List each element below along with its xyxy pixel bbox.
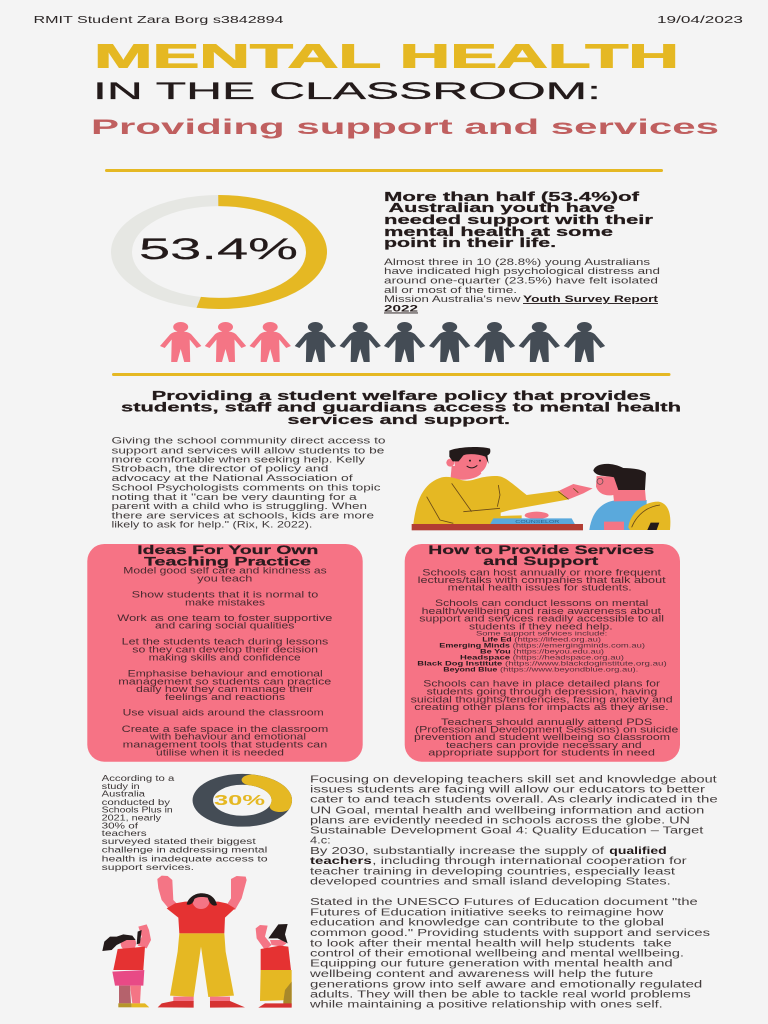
list: teaching ideas: daily how they can manage their [136, 684, 313, 694]
text: plans and professional development: Teachers should annually attend PDS [441, 717, 652, 727]
text: UN Sustainable Development Goal: teachers [310, 856, 372, 867]
text: plans and professional development: appropriate support for students in need [428, 748, 655, 758]
text: plans and professional development: Schools can have in place detailed plans for [423, 679, 660, 689]
panel heading: ideas [137, 543, 318, 568]
list: support services: Black Dog Institute [417, 661, 503, 668]
text: UN Sustainable Development Goal: qualified [609, 846, 667, 857]
panel: ideas for your own teaching practice [87, 543, 363, 762]
text: Schools Plus study: Schools Plus in [102, 805, 173, 815]
list: teaching ideas: Create a safe space in the classroom [122, 724, 328, 734]
stat body text: Youth Survey Report [523, 294, 658, 304]
text: lectures and lessons [418, 567, 666, 631]
list: teaching ideas: Show students that it is normal to [132, 589, 318, 599]
label: counselor sign: COUNSELOR [515, 519, 559, 524]
list: support services: (https://www.beyondblue.org.au). [500, 667, 639, 674]
list: support services: (https://beyou.edu.au) [513, 648, 604, 655]
section heading: student welfare policy [121, 388, 681, 427]
paragraph: direct access to support: noting that it "can be very daunting for a [112, 492, 358, 502]
list: support services: Be You [480, 648, 511, 655]
panel heading: ideas: Teaching Practice [144, 554, 312, 568]
text: UN Sustainable Development Goal [310, 775, 718, 888]
paragraph: direct access to support: Giving the school community direct access to [112, 436, 386, 446]
list: teaching ideas: make mistakes [185, 597, 266, 607]
text: UN Sustainable Development Goal: issues students are facing will allow our educators to better [310, 785, 706, 796]
header: date: 19/04/2023 [657, 15, 744, 26]
list: teaching ideas: Emphasise behaviour and emotional [128, 669, 323, 679]
paragraph: direct access to support: more comfortable when seeking help. Kelly [112, 454, 366, 464]
text: Schools Plus study: According to a [102, 773, 175, 783]
donut chart: 53.4% [122, 201, 316, 303]
paragraph: direct access to support [112, 436, 386, 530]
text: UN Sustainable Development Goal: teacher training in developing countries, especially least [310, 867, 675, 878]
text: plans and professional development: teachers can provide necessary and [446, 740, 642, 750]
text: plans and professional development: creating other plans for impacts as they arise. [414, 702, 669, 712]
text: UNESCO Futures of Education: while maintaining a positive relationship with ones self. [309, 1000, 663, 1011]
stat heading: mental health at some [384, 224, 613, 239]
paragraph: direct access to support: support and services will allow students to be [112, 445, 384, 455]
list: support services: (https://lifeed.org.au) [514, 636, 601, 643]
paragraph: direct access to support: Strobach, the director of policy and [112, 464, 328, 474]
donut chart: 30%: 30% [214, 792, 265, 809]
text: Schools Plus study: study in [102, 781, 140, 791]
paragraph: direct access to support: parent with a child who is struggling. When [112, 501, 367, 511]
list: teaching ideas: utilise when it is needed [156, 747, 284, 757]
stat heading: Australian youth have [388, 200, 615, 215]
text: UN Sustainable Development Goal: UN Goal, mental health and wellbeing information and action [310, 805, 704, 816]
paragraph: direct access to support: there are services at schools, kids are more [112, 510, 374, 520]
illustration: counsellor and student [412, 447, 670, 530]
stat heading: needed support with their [384, 212, 653, 227]
list: support services: Beyond Blue [443, 667, 498, 674]
list: support services: (https://www.blackdoginstitute.org.au) [505, 661, 667, 668]
text: lectures and lessons: mental health issues for students. [448, 583, 632, 593]
text: lectures and lessons: Schools can conduct lessons on mental [435, 598, 648, 608]
stat body text: all or most of the time. [384, 285, 517, 295]
text: UNESCO Futures of Education: adults. They will then be able to tackle real world problems [310, 990, 691, 1001]
text: Schools Plus study: teachers [102, 828, 147, 838]
text: lectures and lessons: health/wellbeing and raise awareness about [422, 606, 662, 616]
list: teaching ideas: management tools that students can [123, 739, 327, 749]
panel heading: services: How to Provide Services [428, 543, 655, 557]
text: UN Sustainable Development Goal: cater to and teach students overall. As clearly indicated in the [310, 795, 718, 806]
figure: boy [256, 924, 292, 1008]
text: plans and professional development [411, 679, 678, 758]
text: UN Sustainable Development Goal: 4.c: [310, 836, 331, 847]
panel heading: ideas: Ideas For Your Own [137, 543, 318, 557]
list: teaching ideas: making skills and confidence [149, 652, 301, 662]
text: Schools Plus study: health is inadequate access to [102, 854, 268, 864]
list: support services: Some support services include: [476, 630, 608, 637]
text: Schools Plus study [102, 773, 268, 872]
stat body text: Almost three in 10 (28.8%) young Australians [384, 257, 651, 267]
list: teaching ideas: Model good self care and kindness as [123, 565, 327, 575]
panel: how to provide services and support [405, 543, 680, 762]
text: UN Sustainable Development Goal: plans are evidently needed in schools across the globe. UN [310, 815, 690, 826]
list: teaching ideas: Use visual aids around the classroom [123, 708, 324, 718]
text: plans and professional development: students going through depression, having [427, 687, 657, 697]
text: UNESCO Futures of Education: education and knowledge can contribute to the global [310, 918, 664, 929]
figure: girl [102, 924, 151, 1007]
stat body text: Mission Australia's new [384, 294, 521, 304]
paragraph: direct access to support: likely to ask for help." (Rix, K. 2022). [112, 520, 312, 530]
text: plans and professional development: (Professional Development Sessions) on suicide [415, 725, 678, 735]
text: UN Sustainable Development Goal: Sustainable Development Goal 4: Quality Education – Target [310, 826, 704, 837]
text: UN Sustainable Development Goal: Focusing on developing teachers skill set and knowledge about [310, 775, 717, 786]
pictogram: ten people, three highlighted [160, 322, 605, 362]
text: UNESCO Futures of Education: control of their emotional wellbeing and mental wellbeing. [310, 948, 684, 959]
text: UNESCO Futures of Education: generations grow into self aware and emotionally regulated [310, 979, 702, 990]
text: Schools Plus study: surveyed stated their biggest [102, 836, 257, 846]
list: teaching ideas: Let the students teach during lessons [122, 637, 329, 647]
list: support services [417, 630, 667, 674]
list: teaching ideas: Work as one team to foster supportive [117, 613, 332, 623]
text: Schools Plus study: 30% of [102, 820, 139, 830]
donut chart: 53.4%: 53.4% [139, 233, 298, 266]
text: Schools Plus study: conducted by [102, 797, 171, 807]
text: UN Sustainable Development Goal: By 2030, substantially increase the supply of [310, 846, 604, 857]
list: support services: Life Ed [482, 636, 512, 643]
text: UN Sustainable Development Goal: developed countries and small island developing States. [310, 877, 671, 888]
stat heading: point in their life. [384, 235, 556, 250]
text: lectures and lessons: Schools can host annually or more frequent [422, 567, 662, 577]
text: UNESCO Futures of Education [309, 897, 710, 1011]
figure: woman [157, 876, 247, 1008]
list: teaching ideas: feelings and reactions [165, 692, 286, 702]
panel heading: services [428, 543, 655, 568]
list: teaching ideas: and caring social qualities [155, 621, 295, 631]
title [91, 38, 719, 139]
stat heading: More than half (53.4%)of [384, 189, 640, 204]
text: Schools Plus study: challenge in addressing mental [102, 845, 267, 855]
header: student name: RMIT Student Zara Borg s3842894 [34, 15, 284, 26]
text: UNESCO Futures of Education: Equipping our future generation with mental health and [310, 959, 673, 970]
list: teaching ideas: with behaviour and emotional [149, 731, 306, 741]
list: teaching ideas: so they can develop their decision [132, 644, 318, 654]
stat body text: around one-quarter (23.5%) have felt isolated [384, 276, 658, 286]
list: teaching ideas: you teach [197, 573, 252, 583]
panel heading: services: and Support [483, 554, 598, 568]
text: plans and professional development: prevention and student wellbeing so classroom [414, 732, 670, 742]
text: lectures and lessons: students if they need help. [469, 621, 613, 631]
stat body text: have indicated high psychological distress and [384, 266, 660, 276]
text: UNESCO Futures of Education: wellbeing content and awareness will help the future [309, 969, 654, 980]
section heading: student welfare policy: students, staff and guardians access to mental health [121, 400, 681, 415]
text: lectures and lessons: support and services readily accessible to all [419, 614, 664, 624]
text: lectures and lessons: lectures/talks with companies that talk about [418, 575, 666, 585]
illustration: woman and two children with raised arms [102, 876, 292, 1008]
text: UNESCO Futures of Education: Futures of Education initiative seeks to reimagine how [310, 907, 664, 918]
list: support services: (https://emergingminds.com.au) [513, 642, 645, 649]
paragraph: direct access to support: advocacy at the National Association of [112, 473, 353, 483]
title: MENTAL HEALTH [94, 38, 679, 74]
section heading: student welfare policy: services and support. [288, 412, 510, 427]
text: UNESCO Futures of Education: Stated in the UNESCO Futures of Education document "the [310, 897, 698, 908]
text: UNESCO Futures of Education: common good." Providing students with support and services [310, 928, 710, 939]
stat heading [384, 189, 653, 250]
text: UNESCO Futures of Education: to look after their mental health will help students take [310, 938, 672, 949]
list: support services: Headspace [460, 655, 511, 662]
section heading: student welfare policy: Providing a student welfare policy that provides [152, 388, 651, 403]
text: Schools Plus study: 2021, nearly [102, 813, 162, 823]
text: Schools Plus study: Australia [102, 789, 145, 799]
title: IN THE CLASSROOM: [93, 78, 601, 105]
list: support services: (https://headspace.org.au) [513, 655, 624, 662]
text: UN Sustainable Development Goal: , including through international cooperation for [372, 856, 688, 867]
list: teaching ideas [117, 565, 332, 757]
text: plans and professional development: suicidal thoughts/tendencies, facing anxiety and [411, 694, 673, 704]
stat body text: 2022 [384, 304, 418, 314]
paragraph: direct access to support: School Psychologists comments on this topic [112, 482, 381, 492]
stat body text [384, 257, 660, 314]
list: teaching ideas: management so students can practice [118, 676, 331, 686]
list: support services: Emerging Minds [439, 642, 511, 649]
text: Schools Plus study: support services. [102, 862, 194, 872]
title: Providing support and services [91, 116, 719, 139]
donut chart: 30% [194, 775, 290, 826]
